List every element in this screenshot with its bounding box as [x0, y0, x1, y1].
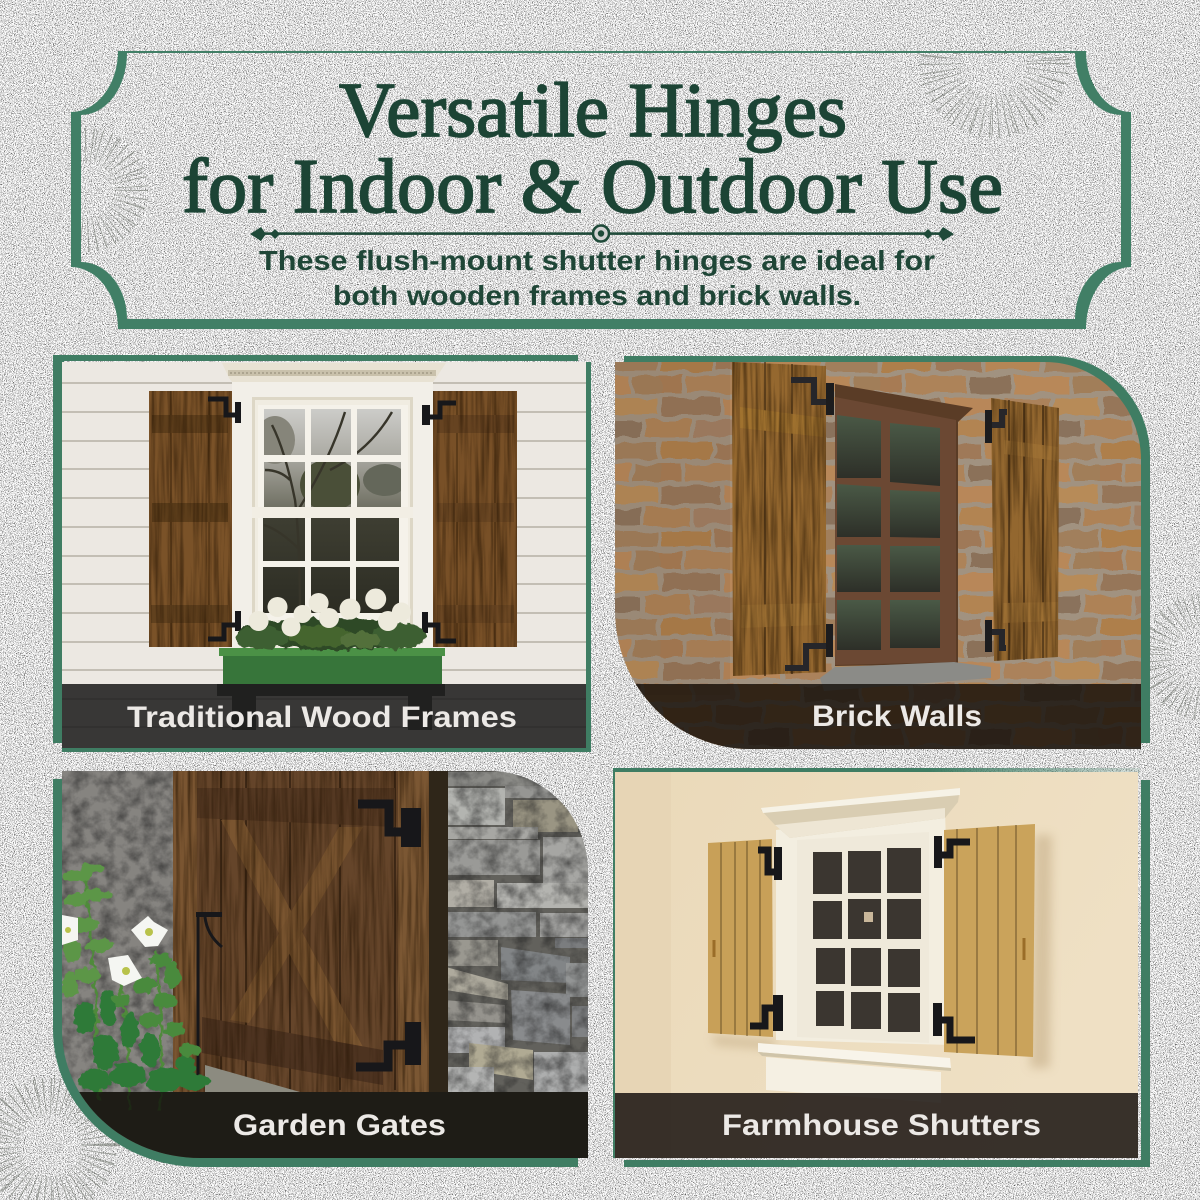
- header frame: [71, 51, 1131, 329]
- caption band: [615, 1093, 1138, 1158]
- subtitle: These flush-mount shutter hinges are ideal for: [259, 245, 935, 276]
- right shutter: [991, 398, 1059, 661]
- header panel: [71, 51, 1131, 329]
- panel border: [53, 779, 578, 1167]
- sill: [820, 662, 991, 691]
- panel: brick walls: [615, 356, 1150, 749]
- divider ornament: [250, 226, 954, 242]
- title: Versatile Hinges: [339, 67, 847, 153]
- caption band: [60, 1092, 590, 1160]
- sunburst: header right: [919, 53, 1069, 138]
- sash: [797, 832, 929, 1043]
- caption: Garden Gates: [233, 1109, 446, 1142]
- flower box: [217, 648, 445, 730]
- caption: Traditional Wood Frames: [127, 701, 517, 734]
- hinges: [208, 399, 456, 641]
- white blooms: [62, 915, 168, 986]
- gate: [173, 770, 429, 1105]
- caption: Farmhouse Shutters: [722, 1109, 1041, 1142]
- gate hinges and latch: [196, 804, 421, 1085]
- right shutter: [433, 391, 517, 647]
- right stone wall: [448, 771, 588, 1092]
- caption band: [615, 684, 1141, 749]
- ground: [205, 1065, 300, 1092]
- pediment: [761, 795, 959, 838]
- window casing: [776, 808, 951, 1045]
- wall shadows: [712, 835, 1052, 1068]
- panel border: [624, 356, 1150, 743]
- flowers and leaves: [236, 588, 426, 650]
- title: for Indoor & Outdoor Use: [182, 143, 1003, 229]
- handles: [714, 938, 1024, 960]
- title: [182, 67, 1003, 229]
- panel border: [53, 355, 591, 752]
- plant: [62, 863, 209, 1110]
- photo: brick wall window: [615, 362, 1141, 749]
- subtitle: [259, 245, 935, 311]
- caption: Brick Walls: [812, 700, 982, 733]
- photo: white siding window: [62, 362, 586, 748]
- sunburst: bottom left: [0, 1089, 106, 1200]
- left shutter: [149, 391, 232, 647]
- left shutter: [732, 362, 826, 676]
- photo: wooden gate: [60, 770, 590, 1162]
- subtitle: both wooden frames and brick walls.: [333, 280, 861, 311]
- sill: [766, 1057, 941, 1093]
- panel: farmhouse shutters: [613, 768, 1150, 1167]
- hinges: [750, 836, 975, 1040]
- panel border: [613, 768, 1140, 774]
- photo: cream wall window: [615, 772, 1138, 1158]
- caption band: [62, 684, 586, 748]
- window: [835, 384, 973, 666]
- sunburst: header left: [81, 128, 148, 252]
- left shutter: [708, 839, 773, 1037]
- panel: garden gates: [53, 770, 590, 1167]
- hinges: [785, 380, 1007, 668]
- sunburst: right edge: [1151, 603, 1200, 711]
- panel: traditional wood frames: [53, 355, 591, 752]
- right shutter: [944, 824, 1035, 1057]
